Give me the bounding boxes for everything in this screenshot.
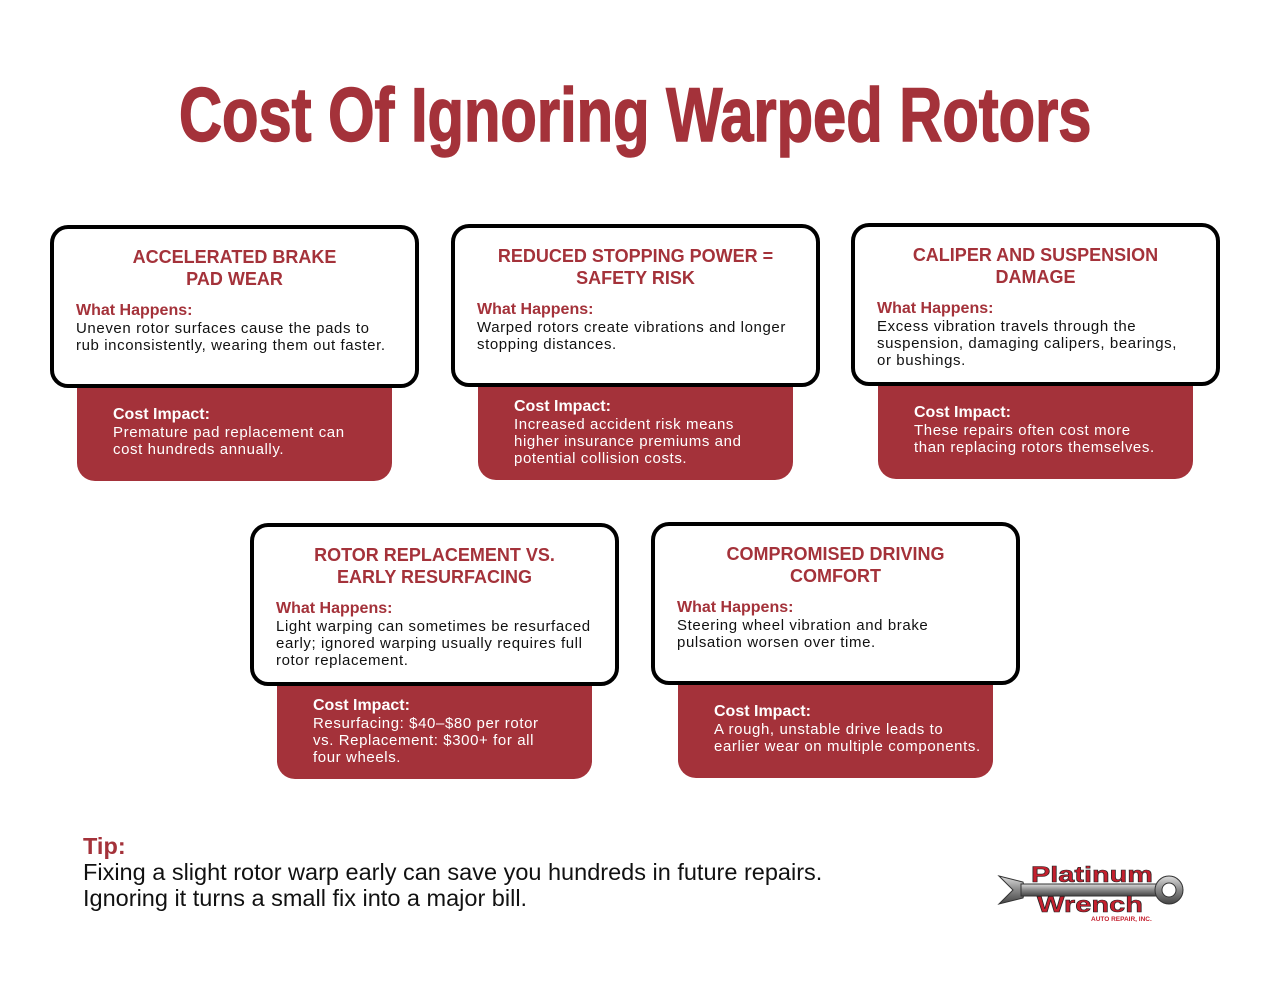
logo: platinum wrench: Platinum	[1031, 862, 1153, 887]
cost impact box	[678, 681, 993, 778]
cost impact box: Resurfacing: $40–$80 per rotor	[313, 715, 539, 732]
what happens box: What Happens:	[76, 302, 192, 319]
what happens box: rub inconsistently, wearing them out faster.	[76, 337, 386, 354]
what happens box	[250, 523, 619, 686]
panel: caliper and suspension damage	[851, 223, 1220, 479]
what happens box: What Happens:	[877, 300, 993, 317]
what happens box: COMFORT	[790, 566, 881, 586]
cost impact box: These repairs often cost more	[914, 422, 1131, 439]
logo: platinum wrench	[998, 862, 1184, 923]
cost impact box: Increased accident risk means	[514, 416, 734, 433]
what happens box: REDUCED STOPPING POWER =	[498, 246, 773, 266]
cost impact box: higher insurance premiums and	[514, 433, 742, 450]
what happens box: Excess vibration travels through the	[877, 318, 1136, 335]
what happens box: What Happens:	[477, 301, 593, 318]
what happens box: Uneven rotor surfaces cause the pads to	[76, 320, 370, 337]
what happens box: pulsation worsen over time.	[677, 634, 876, 651]
tip text: Tip:	[83, 833, 126, 859]
logo: platinum wrench: AUTO REPAIR, INC.	[1091, 916, 1152, 923]
cost impact box: Cost Impact:	[914, 404, 1011, 421]
what happens box: ACCELERATED BRAKE	[133, 247, 336, 267]
what happens box: Light warping can sometimes be resurfaced	[276, 618, 591, 635]
what happens box: Steering wheel vibration and brake	[677, 617, 928, 634]
what happens box: COMPROMISED DRIVING	[726, 544, 944, 564]
tip text	[83, 833, 822, 911]
panel: compromised driving comfort	[651, 522, 1020, 778]
what happens box: What Happens:	[276, 600, 392, 617]
cost impact box: potential collision costs.	[514, 450, 687, 467]
cost impact box: Premature pad replacement can	[113, 424, 345, 441]
cost impact box: four wheels.	[313, 749, 401, 766]
panel: reduced stopping power	[451, 224, 820, 480]
cost impact box	[478, 383, 793, 480]
cost impact box: cost hundreds annually.	[113, 441, 284, 458]
cost impact box: earlier wear on multiple components.	[714, 738, 981, 755]
cost impact box: vs. Replacement: $300+ for all	[313, 732, 534, 749]
what happens box	[50, 225, 419, 388]
cost impact box: Cost Impact:	[113, 406, 210, 423]
what happens box	[451, 224, 820, 387]
cost impact box: than replacing rotors themselves.	[914, 439, 1155, 456]
cost impact box: Cost Impact:	[714, 703, 811, 720]
cost impact box	[277, 682, 592, 779]
what happens box: stopping distances.	[477, 336, 617, 353]
what happens box: What Happens:	[677, 599, 793, 616]
what happens box: early; ignored warping usually requires full	[276, 635, 583, 652]
tip text: Ignoring it turns a small fix into a major bill.	[83, 885, 527, 911]
title: Cost Of Ignoring Warped Rotors	[179, 73, 1091, 158]
what happens box	[651, 522, 1020, 685]
panel: rotor replacement vs resurfacing	[250, 523, 619, 779]
what happens box: PAD WEAR	[186, 269, 283, 289]
what happens box: Warped rotors create vibrations and longer	[477, 319, 786, 336]
cost impact box: Cost Impact:	[514, 398, 611, 415]
what happens box: or bushings.	[877, 352, 966, 369]
what happens box: DAMAGE	[996, 267, 1076, 287]
cost impact box	[77, 384, 392, 481]
what happens box	[851, 223, 1220, 386]
what happens box: SAFETY RISK	[576, 268, 695, 288]
cost impact box: Cost Impact:	[313, 697, 410, 714]
panel: accelerated brake pad wear	[50, 225, 419, 481]
what happens box: rotor replacement.	[276, 652, 409, 669]
cost impact box: A rough, unstable drive leads to	[714, 721, 943, 738]
tip text: Fixing a slight rotor warp early can save you hundreds in future repairs.	[83, 859, 822, 885]
what happens box: suspension, damaging calipers, bearings,	[877, 335, 1177, 352]
logo: platinum wrench: Wrench	[1037, 892, 1143, 917]
what happens box: EARLY RESURFACING	[337, 567, 532, 587]
what happens box: CALIPER AND SUSPENSION	[913, 245, 1158, 265]
cost impact box	[878, 382, 1193, 479]
what happens box: ROTOR REPLACEMENT VS.	[314, 545, 555, 565]
